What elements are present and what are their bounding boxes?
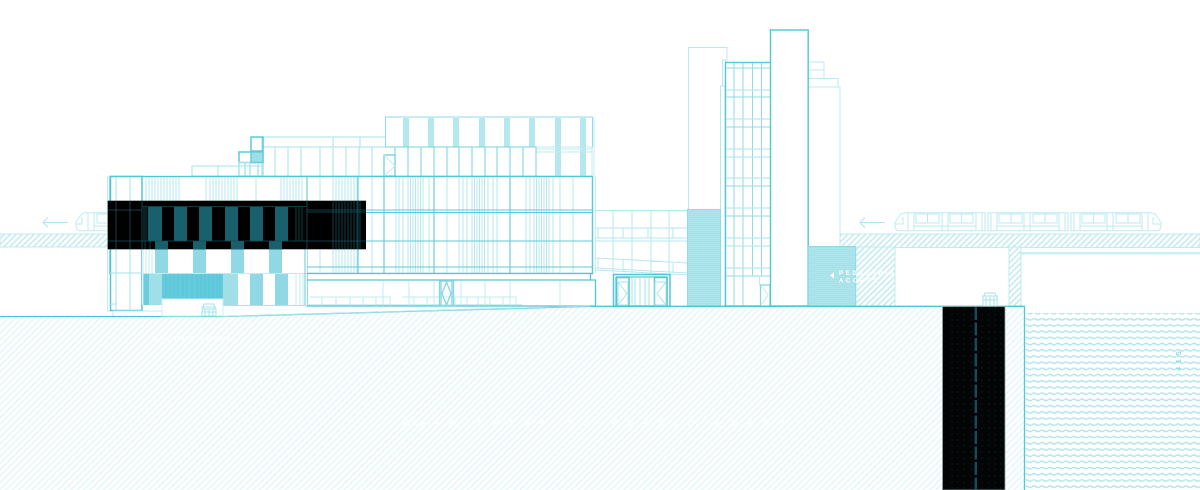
- ground label: GROUND LEVEL: [152, 336, 234, 343]
- right rear volumes: [808, 62, 840, 247]
- water depth label: 415: [1176, 347, 1183, 371]
- glazed tower: [726, 62, 771, 306]
- door: [440, 281, 454, 306]
- light tower: [688, 48, 727, 306]
- arrow: left train direction: [43, 218, 68, 228]
- band frame lines: [108, 201, 366, 249]
- black shaft: [942, 306, 1005, 490]
- lower facade teal panels: [142, 249, 307, 306]
- rear roof volumes: [192, 137, 536, 176]
- pedestrian access block: [808, 246, 904, 306]
- water: [1026, 313, 1200, 490]
- pedestrian arrow: [830, 272, 834, 278]
- tower door: [760, 276, 770, 306]
- driveway box and ramp: [162, 299, 590, 316]
- lower plinth: [307, 274, 596, 306]
- teal stair volume: [688, 210, 720, 306]
- viaduct piers: [856, 247, 1021, 306]
- pedestrian access label: PEDESTRIAN: [839, 271, 904, 277]
- left stair tower: [108, 176, 162, 316]
- plinth lines: [307, 281, 560, 306]
- rail viaduct: right: [840, 234, 1200, 254]
- window: upper door: [384, 155, 395, 176]
- pedestrian access block: ACCESS: [839, 278, 880, 284]
- entrance doors: [614, 274, 670, 306]
- bridge section between buildings: [595, 210, 688, 275]
- black overlay band: [108, 201, 366, 249]
- main facade: [110, 176, 596, 306]
- facade dark structure: [307, 176, 592, 306]
- band teal panels: [148, 207, 288, 249]
- section caption: MAIN ENTRY TO PUBLIC LOBBY: [403, 419, 795, 428]
- shaft dashed centerline: [975, 307, 977, 490]
- ground section: [0, 306, 1024, 490]
- facade light verticals: [146, 177, 573, 273]
- arrow: right train direction: [860, 218, 885, 228]
- rail viaduct: left: [0, 234, 108, 247]
- upper volume with teal columns: [386, 117, 594, 176]
- icon: car left: [201, 304, 216, 316]
- train: left: [76, 213, 108, 231]
- stepped roof boxes: [239, 137, 263, 176]
- shaft faint lines: [952, 307, 1001, 490]
- tall white tower: [770, 30, 808, 306]
- train: right: [895, 213, 1161, 231]
- icon: car right: [982, 293, 998, 306]
- middle volume: [384, 147, 536, 176]
